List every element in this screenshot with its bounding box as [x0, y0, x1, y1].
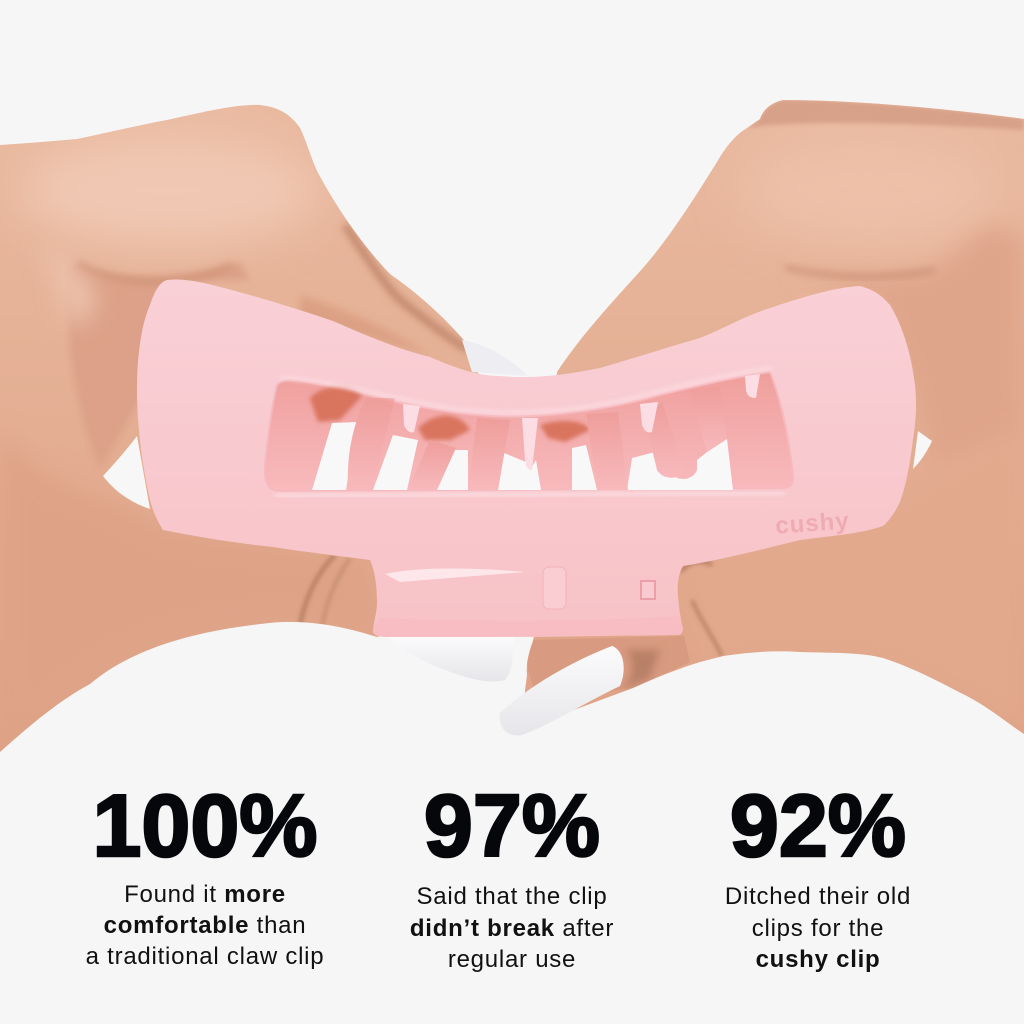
white gaps between teeth	[312, 422, 733, 490]
clip window rim highlight	[280, 368, 772, 412]
stat number: 100%	[92, 776, 318, 875]
right hand	[524, 100, 1024, 734]
stat description: comfortable than	[104, 912, 306, 939]
salmon fingers seen through window	[310, 387, 590, 442]
stat description: clips for the	[752, 915, 884, 942]
gap between right fingers	[913, 431, 932, 469]
clip body	[137, 280, 916, 637]
clip lower rim highlight	[275, 493, 785, 496]
clip tab highlight	[385, 568, 525, 582]
gap between left fingers	[103, 436, 150, 509]
fingernail: lower left	[388, 636, 514, 682]
left hand	[0, 104, 478, 752]
stat: 92%	[725, 776, 911, 973]
clip small prongs	[403, 374, 760, 470]
clip tab bottom edge	[373, 616, 683, 637]
stat description: Ditched their old	[725, 883, 911, 910]
brand mark: cushy	[774, 507, 851, 540]
stat description: a traditional claw clip	[86, 943, 324, 970]
stat description: regular use	[448, 946, 576, 973]
stat description: cushy clip	[756, 946, 880, 973]
photo: hands holding bent clip	[0, 100, 1024, 752]
stat description: Said that the clip	[417, 883, 607, 910]
clip tab square hole	[641, 581, 655, 599]
clip window	[265, 372, 793, 491]
stat number: 97%	[424, 776, 600, 875]
stat: 100%	[86, 776, 324, 970]
stat description: didn’t break after	[410, 915, 614, 942]
stat number: 92%	[730, 776, 906, 875]
clip teeth	[348, 386, 727, 491]
fingernail: lower right	[500, 646, 624, 735]
clip tab button	[543, 567, 566, 609]
pink claw clip	[137, 280, 916, 637]
stat: 97%	[410, 776, 614, 973]
fingernail: upper	[462, 340, 528, 376]
stat description: Found it more	[124, 881, 286, 908]
